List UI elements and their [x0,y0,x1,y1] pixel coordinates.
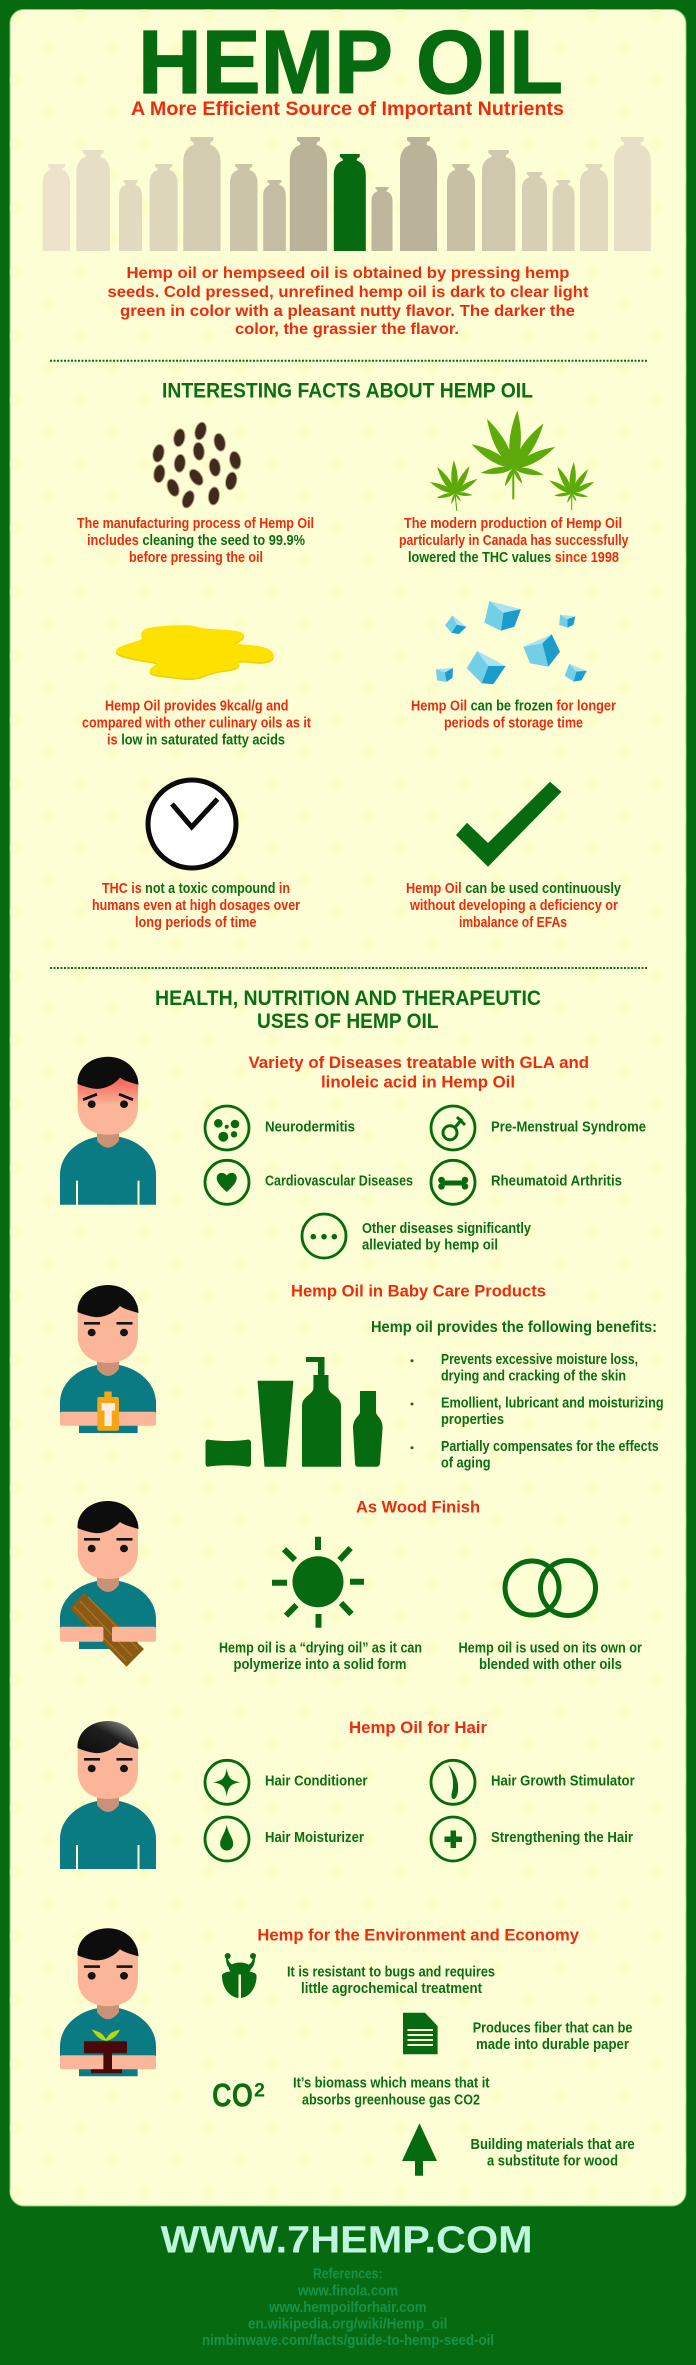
item: other diseases: Other diseases significantly [362,1221,531,1237]
item: biomass [212,2076,490,2114]
subheading: linoleic acid in Hemp Oil [321,1073,515,1092]
fact: ice cubes [411,601,616,732]
item: rheumatoid arthritis [431,1160,622,1204]
fact text: compared with other culinary oils as it [82,716,311,732]
intro paragraph [108,265,589,338]
subheading: As Wood Finish [356,1497,480,1516]
icon: rings [505,1560,596,1616]
icon: hemp seeds [151,421,242,510]
section: diseases [60,1053,646,1258]
item: biomass: It’s biomass which means that it [293,2076,490,2092]
item: building materials: Building materials that are [470,2137,635,2153]
fact text: humans even at high dosages over [92,898,300,914]
fact text: before pressing the oil [129,550,263,566]
item: pre-menstrual syndrome: Pre-Menstrual Syndrome [491,1120,646,1136]
icon: sun [272,1537,364,1628]
section: wood finish [60,1497,642,1673]
references: References: [313,2267,383,2283]
item: hair growth [431,1760,635,1804]
fact text: is low in saturated fatty acids [107,732,285,748]
intro paragraph: seeds. Cold pressed, unrefined hemp oil is dark to clear light [108,284,589,301]
fact text [92,881,300,931]
fact: check mark [406,782,621,931]
subheading: Hemp for the Environment and Economy [257,1926,580,1945]
item: bugs: little agrochemical treatment [301,1981,482,1997]
benefits list [410,1352,664,1472]
item: biomass: CO [212,2077,253,2114]
subheading: Variety of Diseases treatable with GLA and [248,1053,589,1072]
heading: health uses: USES OF HEMP OIL [257,1010,439,1033]
item: pre-menstrual syndrome [431,1106,646,1150]
bottle row [43,137,651,251]
icon: ice cubes [434,601,587,685]
fact text: Hemp Oil can be frozen for longer [411,699,616,715]
benefits list: properties [441,1412,504,1428]
item: hair conditioner [205,1760,368,1804]
item: cardiovascular: Cardiovascular Diseases [265,1174,413,1190]
fact text: Hemp Oil can be used continuously [406,881,621,897]
fact text: particularly in Canada has successfully [399,533,628,549]
item: neurodermitis [205,1106,355,1150]
fact text: The modern production of Hemp Oil [404,516,622,532]
title: HEMP OIL [138,13,563,113]
text: blended: blended with other oils [479,1657,622,1673]
item: building materials [402,2123,635,2176]
fact text: imbalance of EFAs [459,915,567,931]
item: strengthening: Strengthening the Hair [491,1830,633,1846]
item: hair moisturizer [205,1817,364,1861]
fact text: Hemp Oil provides 9kcal/g and [105,699,288,715]
item: bugs: It is resistant to bugs and requires [287,1965,495,1981]
fact text [82,699,311,748]
subheading: Hemp Oil for Hair [349,1718,487,1737]
fact text: THC is not a toxic compound in [102,881,290,897]
fact text [77,516,314,566]
item: biomass: absorbs greenhouse gas CO2 [302,2092,480,2108]
item: neurodermitis: Neurodermitis [265,1120,355,1136]
fact: leaves [399,410,628,566]
fact text: The manufacturing process of Hemp Oil [77,516,314,532]
item: cardiovascular [205,1160,413,1204]
benefits list: Emollient, lubricant and moisturizing [441,1396,664,1412]
person: feverish [60,1057,156,1205]
person: holding bottle [60,1285,156,1433]
item: hair conditioner: Hair Conditioner [265,1774,368,1790]
item: other diseases: alleviated by hemp oil [362,1238,498,1254]
item: hair growth: Hair Growth Stimulator [491,1774,635,1790]
section: hair [60,1718,635,1869]
fact: oil spill [82,627,311,748]
text: blended: Hemp oil is used on its own or [458,1640,642,1656]
benefits list: Prevents excessive moisture loss, [441,1352,638,1368]
item: paper [403,2013,632,2054]
item: bugs [222,1953,495,1998]
fact text: includes cleaning the seed to 99.9% [87,533,305,549]
benefits list: of aging [441,1456,490,1472]
fact text [411,699,616,732]
item: biomass: 2 [254,2081,265,2102]
intro paragraph: Hemp oil or hempseed oil is obtained by pressing hemp [126,265,570,282]
subheading: Hemp Oil in Baby Care Products [291,1282,546,1301]
person: holding plank [60,1501,156,1667]
references: nimbinwave.com/facts/guide-to-hemp-seed-oil [202,2333,494,2349]
references: www.hempoilforhair.com [268,2300,427,2316]
intro paragraph: color, the grassier the flavor. [235,321,459,338]
icon: baby care products [206,1357,383,1467]
fact text: long periods of time [135,915,256,931]
item: strengthening [431,1817,633,1861]
subheading [248,1053,589,1092]
icon: oil puddle [118,627,272,679]
references: en.wikipedia.org/wiki/Hemp_oil [248,2316,447,2332]
item: building materials: a substitute for wood [487,2154,618,2170]
fact text [406,881,621,931]
fact: clock [92,780,300,931]
icon: hemp leaves [427,410,595,513]
item: rheumatoid arthritis: Rheumatoid Arthritis [491,1174,622,1190]
heading: interesting facts: INTERESTING FACTS ABOUT HEMP OIL [162,380,533,403]
fact text [399,516,628,566]
fact text: periods of storage time [444,716,583,732]
icon: clock [148,780,236,868]
fact: seeds [77,421,314,566]
intro paragraph: green in color with a pleasant nutty flavor. The darker the [120,303,575,320]
fact text: without developing a deficiency or [409,898,618,914]
heading: health uses [155,987,541,1033]
item: hair moisturizer: Hair Moisturizer [265,1830,364,1846]
heading: health uses: HEALTH, NUTRITION AND THERAPEUTIC [155,987,541,1010]
benefits list: drying and cracking of the skin [441,1369,626,1385]
benefits list: Partially compensates for the effects [441,1439,659,1455]
benefits heading: Hemp oil provides the following benefits: [371,1319,657,1336]
text: blended [458,1640,642,1673]
text: drying oil: Hemp oil is a “drying oil” as it can [219,1640,422,1656]
person: shiny hair [60,1721,156,1869]
references [202,2267,494,2349]
icon: check mark [456,782,562,867]
item: paper: made into durable paper [476,2037,629,2053]
subtitle: A More Efficient Source of Important Nutrients [131,99,564,120]
section: baby care [60,1282,664,1472]
references: www.finola.com [297,2283,398,2299]
item: paper: Produces fiber that can be [473,2020,632,2036]
website url: WWW.7HEMP.COM [161,2219,533,2261]
section: environment [60,1926,635,2176]
fact text: lowered the THC values since 1998 [408,550,619,566]
text: drying oil: polymerize into a solid form [234,1657,406,1673]
item: other diseases [302,1214,531,1258]
text: drying oil [219,1640,422,1673]
person: holding plant [60,1928,156,2076]
